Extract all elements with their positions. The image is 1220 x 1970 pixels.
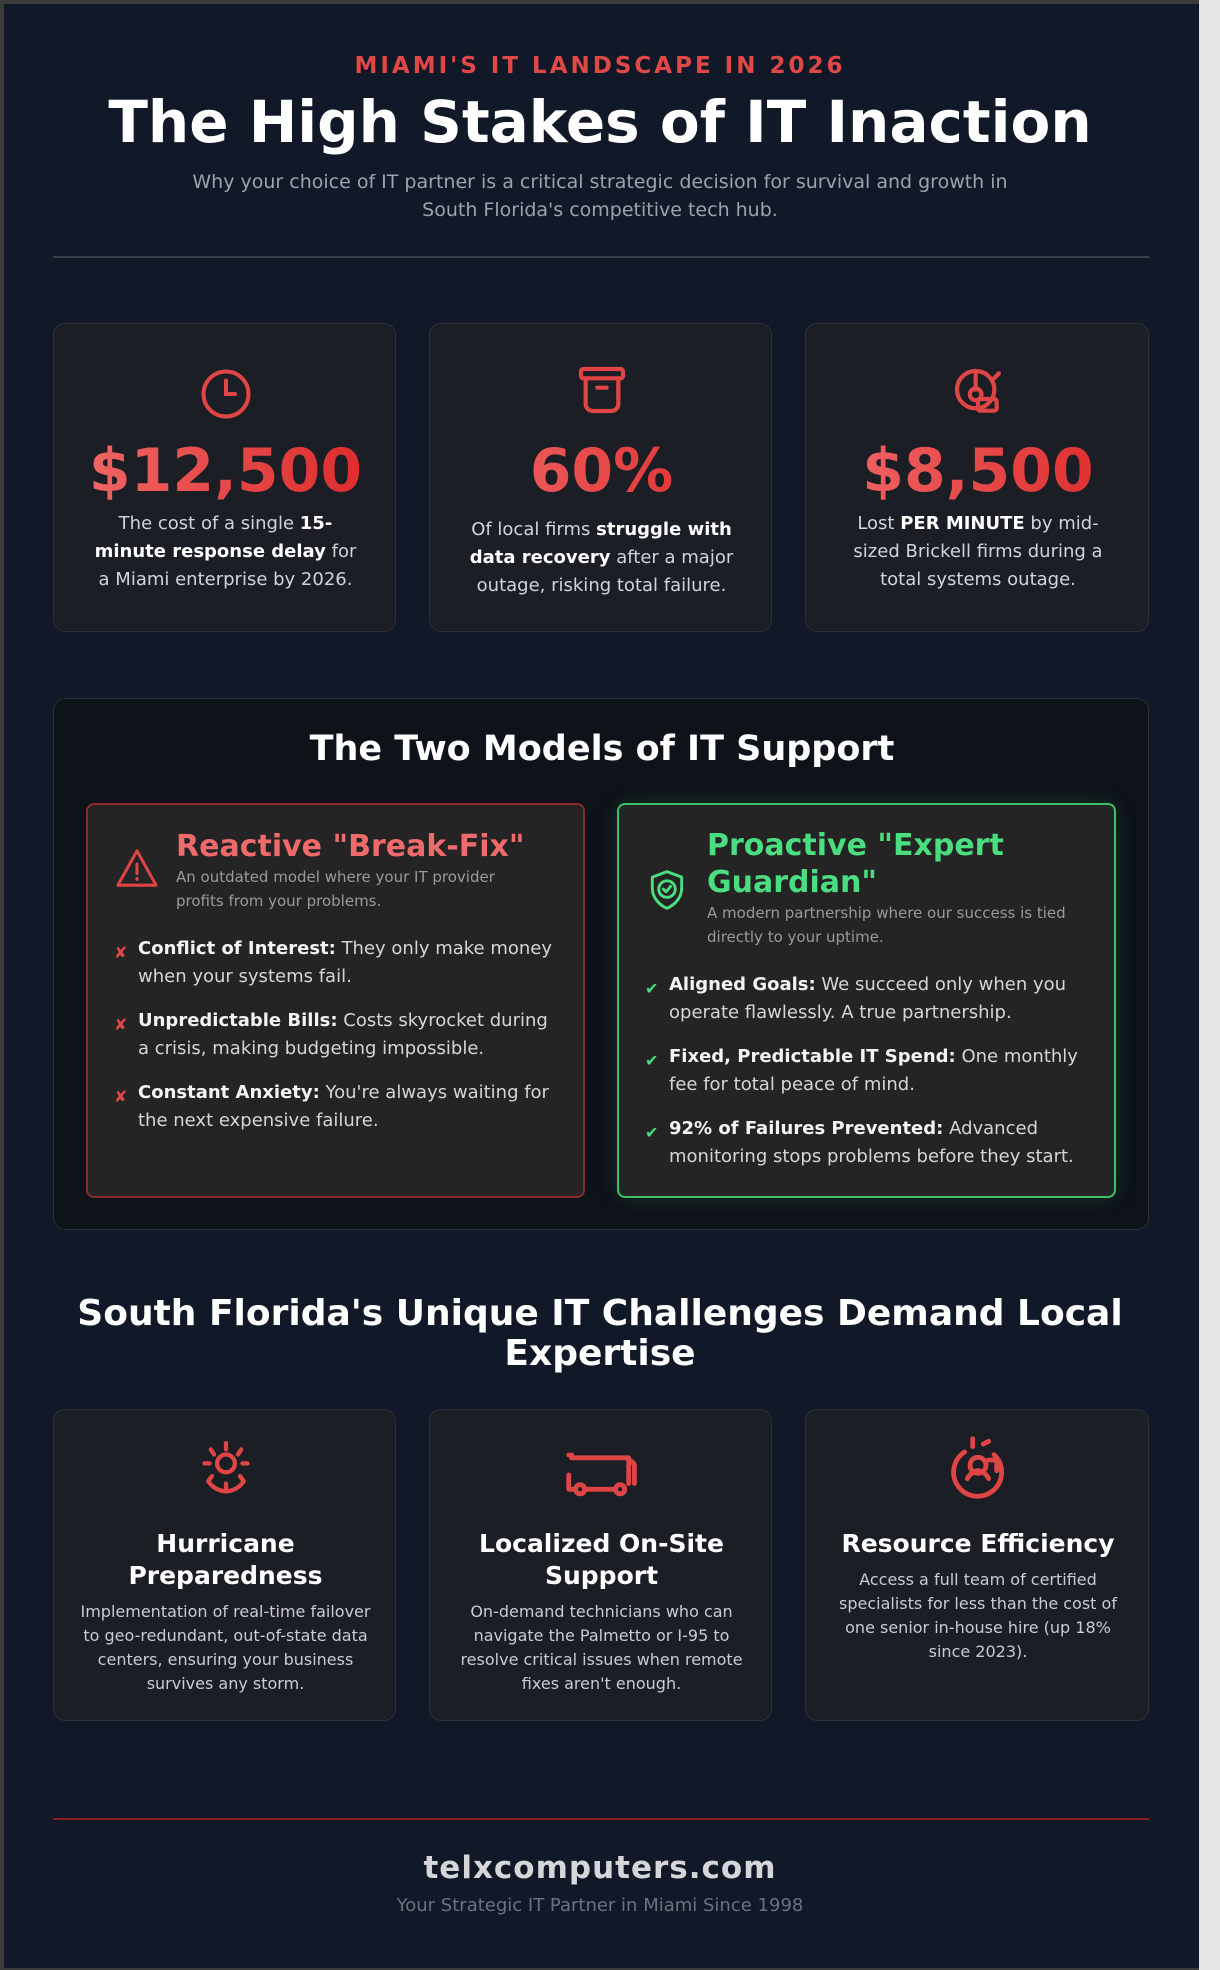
bullets: 92% of Failures Prevented: Advanced monitoring stops problems before they start. [669, 1118, 1074, 1167]
card: resource efficiency [805, 1409, 1149, 1721]
description: Lost PER MINUTE by mid-sized Brickell firms during a total systems outage. [853, 513, 1103, 590]
title: Hurricane [156, 1529, 295, 1558]
bullets [114, 938, 552, 1131]
title: Preparedness [128, 1561, 323, 1590]
bullets: Unpredictable Bills: Costs skyrocket during a crisis, making budgeting impossible. [138, 1010, 548, 1059]
icon: team [951, 1436, 1004, 1499]
title [479, 1529, 724, 1590]
title: Resource Efficiency [841, 1529, 1115, 1558]
bullets: Aligned Goals: We succeed only when you operate flawlessly. A true partnership. [669, 974, 1066, 1023]
eyebrow: MIAMI'S IT LANDSCAPE IN 2026 [354, 53, 846, 79]
bullets: Conflict of Interest: They only make money when your systems fail. [138, 938, 552, 987]
bullets: ✘ [114, 943, 127, 962]
icon: sun/storm [202, 1440, 250, 1494]
description: On-demand technicians who can navigate the Palmetto or I-95 to resolve critical issues when remote fixes aren't enough. [460, 1602, 743, 1693]
bullets: ✔ [645, 1051, 658, 1070]
heading: Reactive "Break-Fix" [176, 829, 524, 864]
description: A modern partnership where our success is tied directly to your uptime. [707, 904, 1066, 946]
icon: money loss [954, 368, 1002, 413]
number: $8,500 [862, 436, 1094, 506]
section heading: local challenges: South Florida's Unique IT Challenges Demand Local Expertise [77, 1293, 1123, 1374]
heading: The Two Models of IT Support [310, 729, 894, 769]
description: An outdated model where your IT provider profits from your problems. [176, 868, 495, 910]
title [128, 1529, 323, 1590]
number: 60% [530, 436, 673, 506]
card: reactive [86, 803, 585, 1198]
title: The High Stakes of IT Inaction [108, 88, 1092, 156]
card: hurricane [53, 1409, 396, 1721]
icon: clock [202, 370, 250, 418]
stat card: 60% [429, 323, 772, 632]
description: The cost of a single 15-minute response delay for a Miami enterprise by 2026. [95, 513, 356, 590]
panel: two models [53, 698, 1149, 1230]
bullets: ✔ [645, 1123, 658, 1142]
bullets: Constant Anxiety: You're always waiting for the next expensive failure. [138, 1082, 549, 1131]
title: Support [545, 1561, 658, 1590]
stat card: 8,500 [805, 323, 1149, 632]
icon: vehicle [566, 1452, 637, 1496]
card: proactive [617, 803, 1116, 1198]
stat card: 12,500 [53, 323, 396, 632]
icon: shield [650, 870, 684, 910]
footer: domain: telxcomputers.com [423, 1850, 777, 1886]
card: on-site [429, 1409, 772, 1721]
description: Implementation of real-time failover to geo-redundant, out-of-state data centers, ensuring your business survives any storm. [80, 1602, 370, 1693]
icon: warning [116, 849, 158, 887]
heading: Proactive "Expert Guardian" [707, 828, 1004, 900]
subtitle: Why your choice of IT partner is a critical strategic decision for survival and growth in South Florida's competitive tech hub. [192, 171, 1008, 221]
bullets: ✘ [114, 1015, 127, 1034]
title: Localized On-Site [479, 1529, 724, 1558]
number [806, 436, 1150, 506]
description: Access a full team of certified specialists for less than the cost of one senior in-house hire (up 18% since 2023). [839, 1570, 1117, 1661]
bullets [645, 974, 1078, 1167]
footer: tagline: Your Strategic IT Partner in Miami Since 1998 [397, 1895, 803, 1916]
number [430, 436, 773, 506]
bullets: ✘ [114, 1087, 127, 1106]
description: Of local firms struggle with data recovery after a major outage, risking total failure. [470, 519, 733, 596]
bullets: ✔ [645, 979, 658, 998]
bullets: Fixed, Predictable IT Spend: One monthly fee for total peace of mind. [669, 1046, 1078, 1095]
number: $12,500 [89, 436, 362, 506]
icon: archive box [578, 366, 626, 414]
